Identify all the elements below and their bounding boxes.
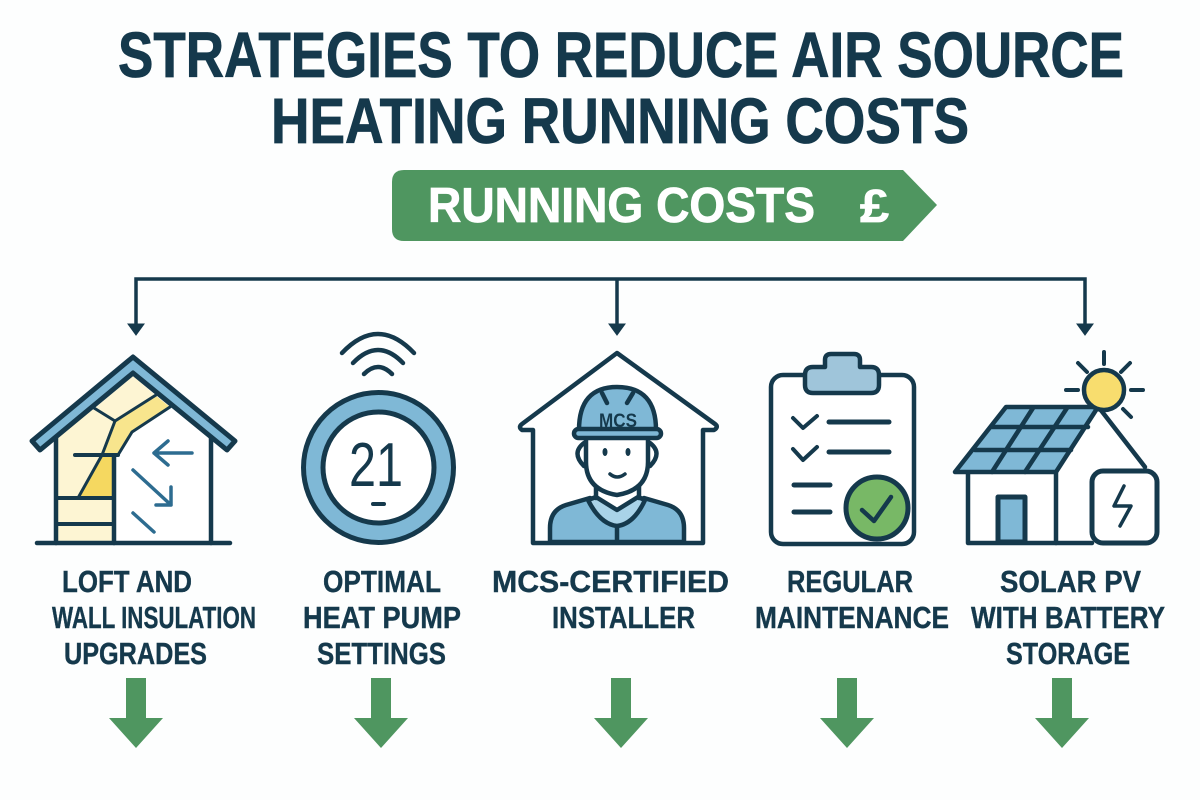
label: regular maintenance: REGULAR: [787, 564, 913, 599]
label: regular maintenance: [755, 564, 949, 635]
banner: running costs: £: [860, 180, 889, 232]
label: solar PV with battery storage: [971, 564, 1165, 671]
icon: smart thermostat: [304, 334, 454, 542]
label: MCS-certified installer: [492, 564, 729, 635]
icon: insulated house: [32, 357, 235, 543]
label: solar PV with battery storage: STORAGE: [1006, 636, 1130, 671]
icon: MCS installer in house: [520, 353, 717, 543]
connector arrows: [128, 279, 1093, 335]
banner: running costs: RUNNING COSTS: [428, 179, 815, 233]
label: solar PV with battery storage: WITH BATTERY: [971, 600, 1165, 635]
icon: smart thermostat: 21: [349, 431, 403, 500]
label: loft and wall insulation: LOFT AND: [62, 564, 192, 599]
label: optimal heat pump settings: SETTINGS: [317, 636, 446, 671]
label: loft and wall insulation: UPGRADES: [64, 636, 207, 671]
label: optimal heat pump settings: HEAT PUMP: [303, 600, 461, 635]
label: loft and wall insulation: WALL INSULATION: [52, 600, 256, 635]
arrow: down 5: [1035, 678, 1089, 748]
label: optimal heat pump settings: OPTIMAL: [323, 564, 441, 599]
label: regular maintenance: MAINTENANCE: [755, 600, 949, 635]
label: MCS-certified installer: INSTALLER: [552, 600, 695, 635]
label: loft and wall insulation: [52, 564, 256, 671]
label: MCS-certified installer: MCS-CERTIFIED: [492, 564, 729, 599]
label: optimal heat pump settings: [303, 564, 461, 671]
banner: running costs: [392, 170, 937, 241]
label: solar PV with battery storage: SOLAR PV: [1000, 564, 1141, 599]
icon: maintenance clipboard: [771, 354, 914, 544]
title: HEATING RUNNING COSTS: [271, 85, 969, 157]
title: [118, 19, 1124, 157]
arrow: down 3: [594, 678, 648, 748]
arrow: down 2: [354, 678, 408, 748]
arrow: down 4: [820, 678, 874, 748]
icon: solar house with battery: [955, 352, 1157, 543]
arrow: down 1: [109, 678, 163, 748]
icon: MCS installer in house: MCS: [599, 411, 637, 432]
